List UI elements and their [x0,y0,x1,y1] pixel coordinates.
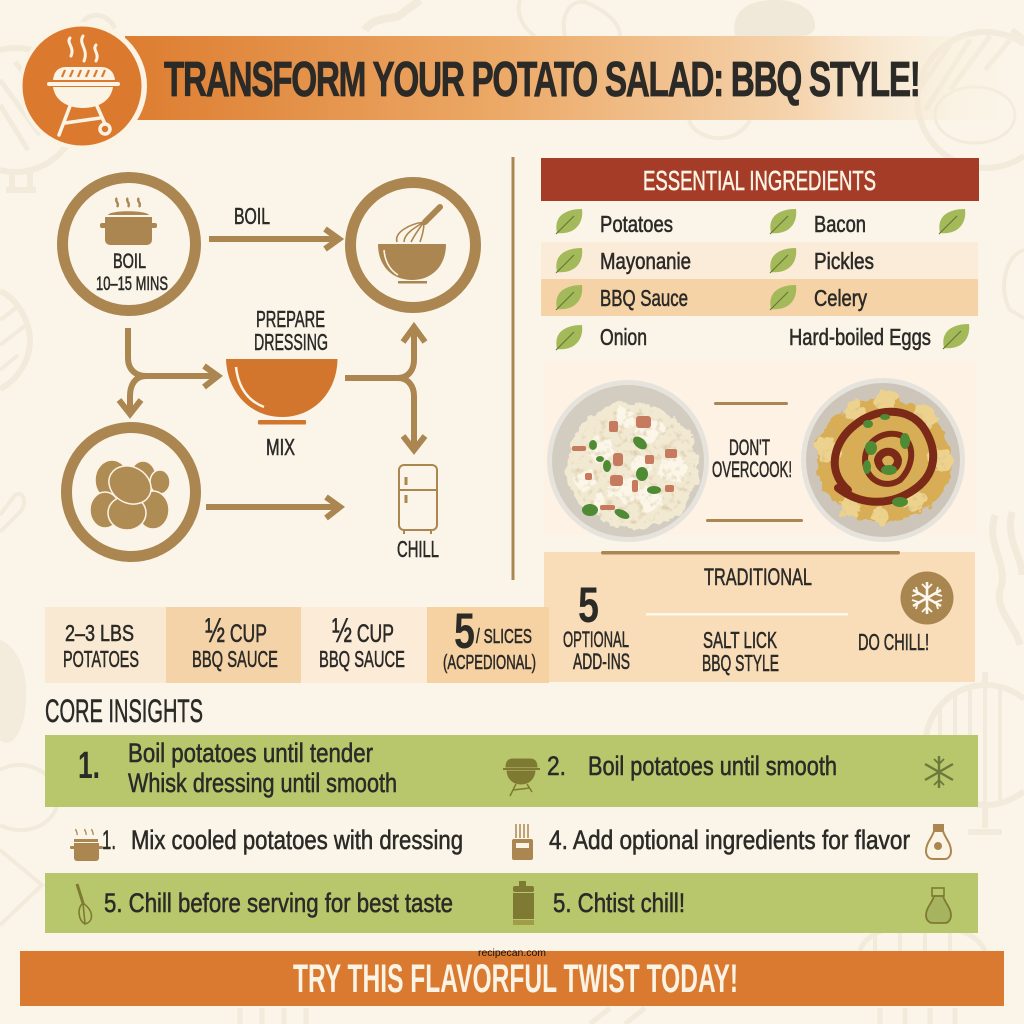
step: potatoes circle [66,428,196,556]
step: whisk bowl circle [350,182,476,308]
header banner [125,36,1024,120]
insight 4: 4. Add optional ingredients for flavor [549,825,910,855]
quantity: slices: (ACPEDIONAL) [443,652,536,674]
panel: essential ingredients: Pickles [814,248,874,274]
panel: essential ingredients: Mayonanie [600,248,691,274]
arrow: boil to dressing and potatoes [119,328,218,414]
stat: optional add-ins [563,577,630,674]
quantity: bbq sauce [192,612,278,672]
quantity: slices: 5 [454,603,475,659]
stat: optional add-ins: OPTIONAL [563,627,629,652]
label: traditional vs salt lick [646,564,848,676]
stat: optional add-ins: 5 [578,577,599,633]
insight 3: 1. [102,825,116,855]
panel: essential ingredients: Onion [600,324,647,350]
step: prepare dressing bowl: DRESSING [254,329,328,355]
arrow: potatoes to chill [206,497,340,518]
step: boil circle: 10–15 MINS [96,274,168,295]
panel: insights list [45,735,978,933]
quantity: bbq sauce: ½ CUP [205,612,267,650]
icon: small grill [503,759,540,796]
step: chill fridge [397,465,439,562]
arrow: dressing fork up and down [345,327,425,450]
source credit: recipecan.com [478,948,546,959]
arrow: boil to whisk: BOIL [234,203,270,229]
icon: small pot [70,829,103,861]
step: prepare dressing bowl [226,306,338,460]
panel: salad comparison [544,362,976,542]
insight 5: 5. Chill before serving for best taste [104,888,453,918]
panel: essential ingredients: Hard-boiled Eggs [789,324,931,350]
panel: essential ingredients: Potatoes [600,211,673,237]
callout: don't overcook: DON'T [729,435,770,460]
icon: sauce bottle [926,824,951,859]
step: boil circle [62,178,196,310]
label: traditional vs salt lick: TRADITIONAL [704,564,812,591]
panel: essential ingredients: BBQ Sauce [600,285,688,311]
title: TRANSFORM YOUR POTATO SALAD: BBQ STYLE! [164,52,921,107]
call to action banner: TRY THIS FLAVORFUL TWIST TODAY! [293,957,738,1001]
flow diagram [62,178,476,562]
insight 6: 5. Chtist chill! [553,888,685,918]
label: traditional vs salt lick: SALT LICK [703,627,777,653]
heading: core insights: CORE INSIGHTS [45,693,203,729]
quantity: bbq sauce second [319,612,405,672]
step: prepare dressing bowl: PREPARE [256,306,325,332]
panel: essential ingredients: Celery [814,285,867,311]
icon: olive jar [513,881,534,925]
icon: whisk [77,884,92,924]
quantity: bbq sauce: BBQ SAUCE [192,646,278,672]
quantity: bbq sauce second: ½ CUP [332,612,394,650]
insight 1 [78,738,397,798]
panel: essential ingredients: Bacon [814,211,866,237]
icon: olive snowflake [925,756,953,788]
stat: optional add-ins: ADD-INS [573,649,630,674]
icon: snowflake badge [900,572,954,624]
quantity: potatoes: 2–3 LBS [65,620,134,646]
step: prepare dressing bowl: MIX [266,434,295,460]
callout: don't overcook: OVERCOOK! [712,457,792,482]
insight 1: Whisk dressing until smooth [128,768,397,798]
insight 3: Mix cooled potatoes with dressing [131,825,463,855]
label: do chill: DO CHILL! [858,629,929,655]
panel: quantities strip [45,603,549,683]
quantity: bbq sauce second: BBQ SAUCE [319,646,405,672]
call to action banner [20,951,1004,1006]
image: bbq potato salad bowl [801,378,965,542]
insight 1: 1. [78,745,100,787]
icon: spice jar [512,824,533,860]
heading: essential ingredients: ESSENTIAL INGREDIENTS [643,165,876,196]
insight 2: Boil potatoes until smooth [588,751,837,781]
label: traditional vs salt lick: BBQ STYLE [702,650,779,676]
quantity: slices: / SLICES [476,626,532,648]
icon: grill badge [19,22,147,150]
quantity: potatoes: POTATOES [63,646,139,672]
step: boil circle: BOIL [113,250,146,273]
image: traditional potato salad bowl [547,380,709,542]
quantity: slices [443,603,536,674]
arrow: boil to whisk [209,203,339,249]
insight 2: 2. [547,751,566,781]
step: chill fridge: CHILL [397,536,439,562]
icon: olive bottle [926,888,951,923]
callout: don't overcook [706,402,803,522]
panel: essential ingredients [541,158,979,350]
quantity: potatoes [63,620,139,672]
insight 1: Boil potatoes until tender [128,738,373,768]
panel: comparison summary [544,551,975,682]
